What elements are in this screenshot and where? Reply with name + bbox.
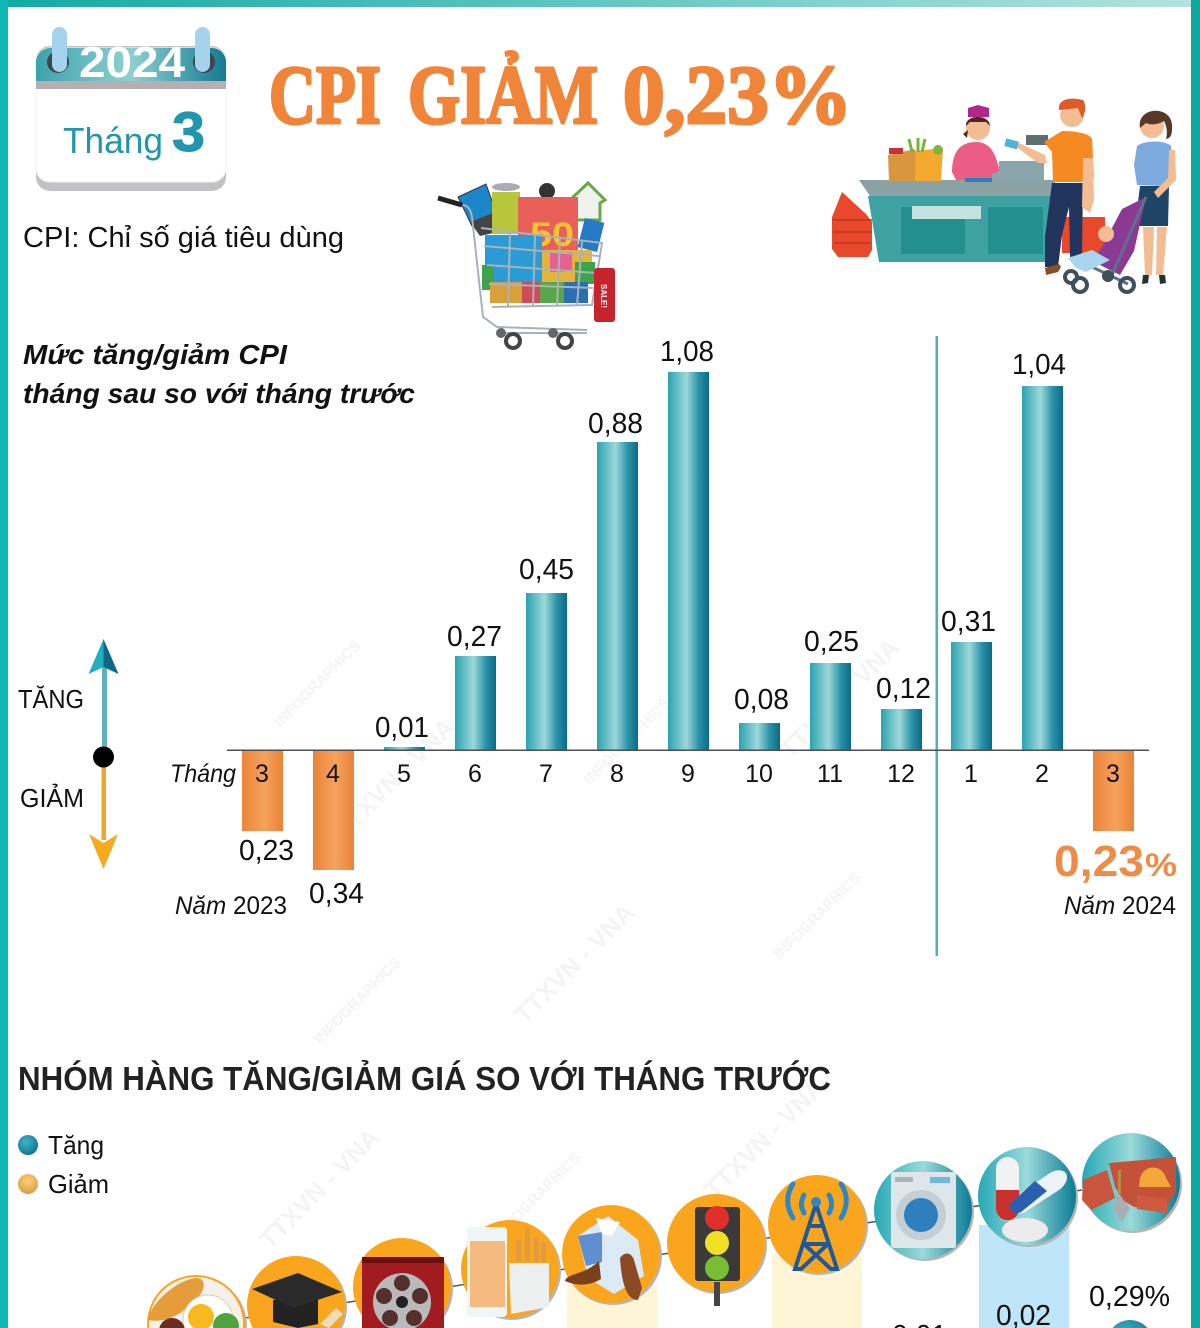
year 2024: Năm 2024 — [1064, 892, 1176, 920]
watermarks: TTXVN - VNA — [509, 898, 640, 1029]
month labels: 5 — [397, 760, 411, 788]
CPI definition: CPI: Chỉ số giá tiêu dùng — [23, 222, 344, 254]
cart contents — [485, 235, 542, 283]
watermarks: INFOGRAPHICS — [491, 1149, 584, 1243]
icon: education — [247, 1256, 347, 1328]
counter — [859, 180, 1055, 196]
value labels: 0,01 — [375, 712, 429, 744]
direction arrows — [18, 639, 118, 869]
value labels: 0,88 — [588, 408, 643, 440]
watermarks: TTXVN - VNA — [254, 1123, 385, 1254]
icon: traffic — [667, 1194, 767, 1306]
chart subtitle: tháng sau so với tháng trước — [23, 378, 415, 409]
month labels: 7 — [539, 760, 553, 788]
highlight value: 0,23 — [1054, 837, 1144, 886]
CPI bar chart: Tháng — [170, 760, 236, 788]
chart subtitle: Mức tăng/giảm CPI — [23, 339, 288, 370]
icon: shopping cart: SALE! — [599, 284, 608, 308]
CPI bar chart — [170, 336, 1177, 956]
calendar badge — [36, 27, 226, 191]
groceries — [888, 149, 915, 181]
man — [1044, 131, 1094, 182]
section heading: NHÓM HÀNG TĂNG/GIẢM GIÁ SO VỚI THÁNG TRƯỚC — [18, 1060, 831, 1097]
watermarks: INFOGRAPHICS — [581, 694, 674, 788]
value labels — [239, 336, 1066, 910]
icon: drinks and tobacco — [461, 1220, 561, 1320]
indicator dot — [1107, 1320, 1153, 1328]
watermarks: TTXVN - VNA — [699, 1073, 830, 1204]
value labels: 0,45 — [519, 554, 574, 586]
month labels — [255, 760, 1120, 788]
icon: construction materials — [1082, 1133, 1182, 1233]
legend: Giảm — [48, 1169, 109, 1199]
icon: food — [147, 1275, 247, 1328]
month labels: 3 — [255, 760, 269, 788]
legend: Tăng — [48, 1130, 104, 1160]
year 2023: Năm 2023 — [175, 892, 287, 920]
baskets — [832, 192, 872, 257]
legend — [18, 1130, 109, 1199]
icon: household appliances — [874, 1161, 974, 1261]
watermarks: TTXVN - VNA — [774, 633, 905, 764]
value labels: 1,04 — [1012, 349, 1066, 381]
value labels: 0,12 — [876, 673, 931, 705]
watermarks: INFOGRAPHICS — [311, 954, 404, 1048]
month labels: 3 — [1106, 760, 1120, 788]
label: increase: TĂNG — [18, 684, 84, 714]
group values: 0,29% — [1089, 1281, 1170, 1313]
icon: shopping cart: 50 — [530, 216, 574, 254]
title: CPI — [269, 49, 381, 142]
title: 0,23% — [623, 49, 852, 142]
value labels: 0,08 — [734, 684, 789, 716]
month labels: 10 — [745, 760, 773, 788]
watermarks — [254, 633, 905, 1254]
month labels: 6 — [468, 760, 482, 788]
watermarks: INFOGRAPHICS — [271, 637, 364, 731]
value labels: 1,08 — [660, 336, 714, 368]
watermarks: TTXVN - VNA — [329, 713, 460, 844]
title — [269, 49, 852, 142]
label: decrease: GIẢM — [20, 783, 84, 813]
month labels: 1 — [964, 760, 978, 788]
illustration: checkout counter — [832, 99, 1176, 292]
value labels: 0,25 — [804, 626, 859, 658]
year divider — [936, 336, 938, 956]
month labels: 4 — [326, 760, 340, 788]
title: GIẢM — [408, 49, 598, 142]
month labels: 8 — [610, 760, 624, 788]
stroller — [1092, 197, 1146, 275]
month labels: 9 — [681, 760, 695, 788]
month labels: 12 — [887, 760, 915, 788]
group columns — [567, 1225, 1069, 1328]
calendar year: 2024 — [79, 38, 186, 87]
group values — [892, 1281, 1170, 1328]
value labels: 0,23 — [239, 835, 294, 867]
cart frame — [463, 205, 602, 333]
icon: culture — [353, 1238, 453, 1328]
icon: clothing — [562, 1205, 662, 1305]
woman — [1134, 142, 1175, 186]
highlight value — [1054, 837, 1177, 886]
value labels: 0,27 — [447, 621, 502, 653]
connector line — [245, 1190, 1082, 1318]
bars — [242, 372, 1134, 870]
icon: shopping cart — [438, 183, 615, 348]
highlight value: % — [1145, 847, 1177, 883]
month labels: 11 — [817, 760, 843, 788]
calendar month: Tháng — [63, 120, 163, 161]
month labels: 2 — [1035, 760, 1049, 788]
watermarks: INFOGRAPHICS — [771, 869, 864, 963]
calendar badge: 3 — [172, 100, 205, 163]
icon: medicine — [978, 1147, 1078, 1247]
cashier — [952, 142, 1000, 180]
value labels: 0,31 — [941, 606, 996, 638]
icon: telecommunications — [768, 1175, 868, 1275]
value labels: 0,34 — [309, 878, 364, 910]
register — [992, 161, 1044, 182]
